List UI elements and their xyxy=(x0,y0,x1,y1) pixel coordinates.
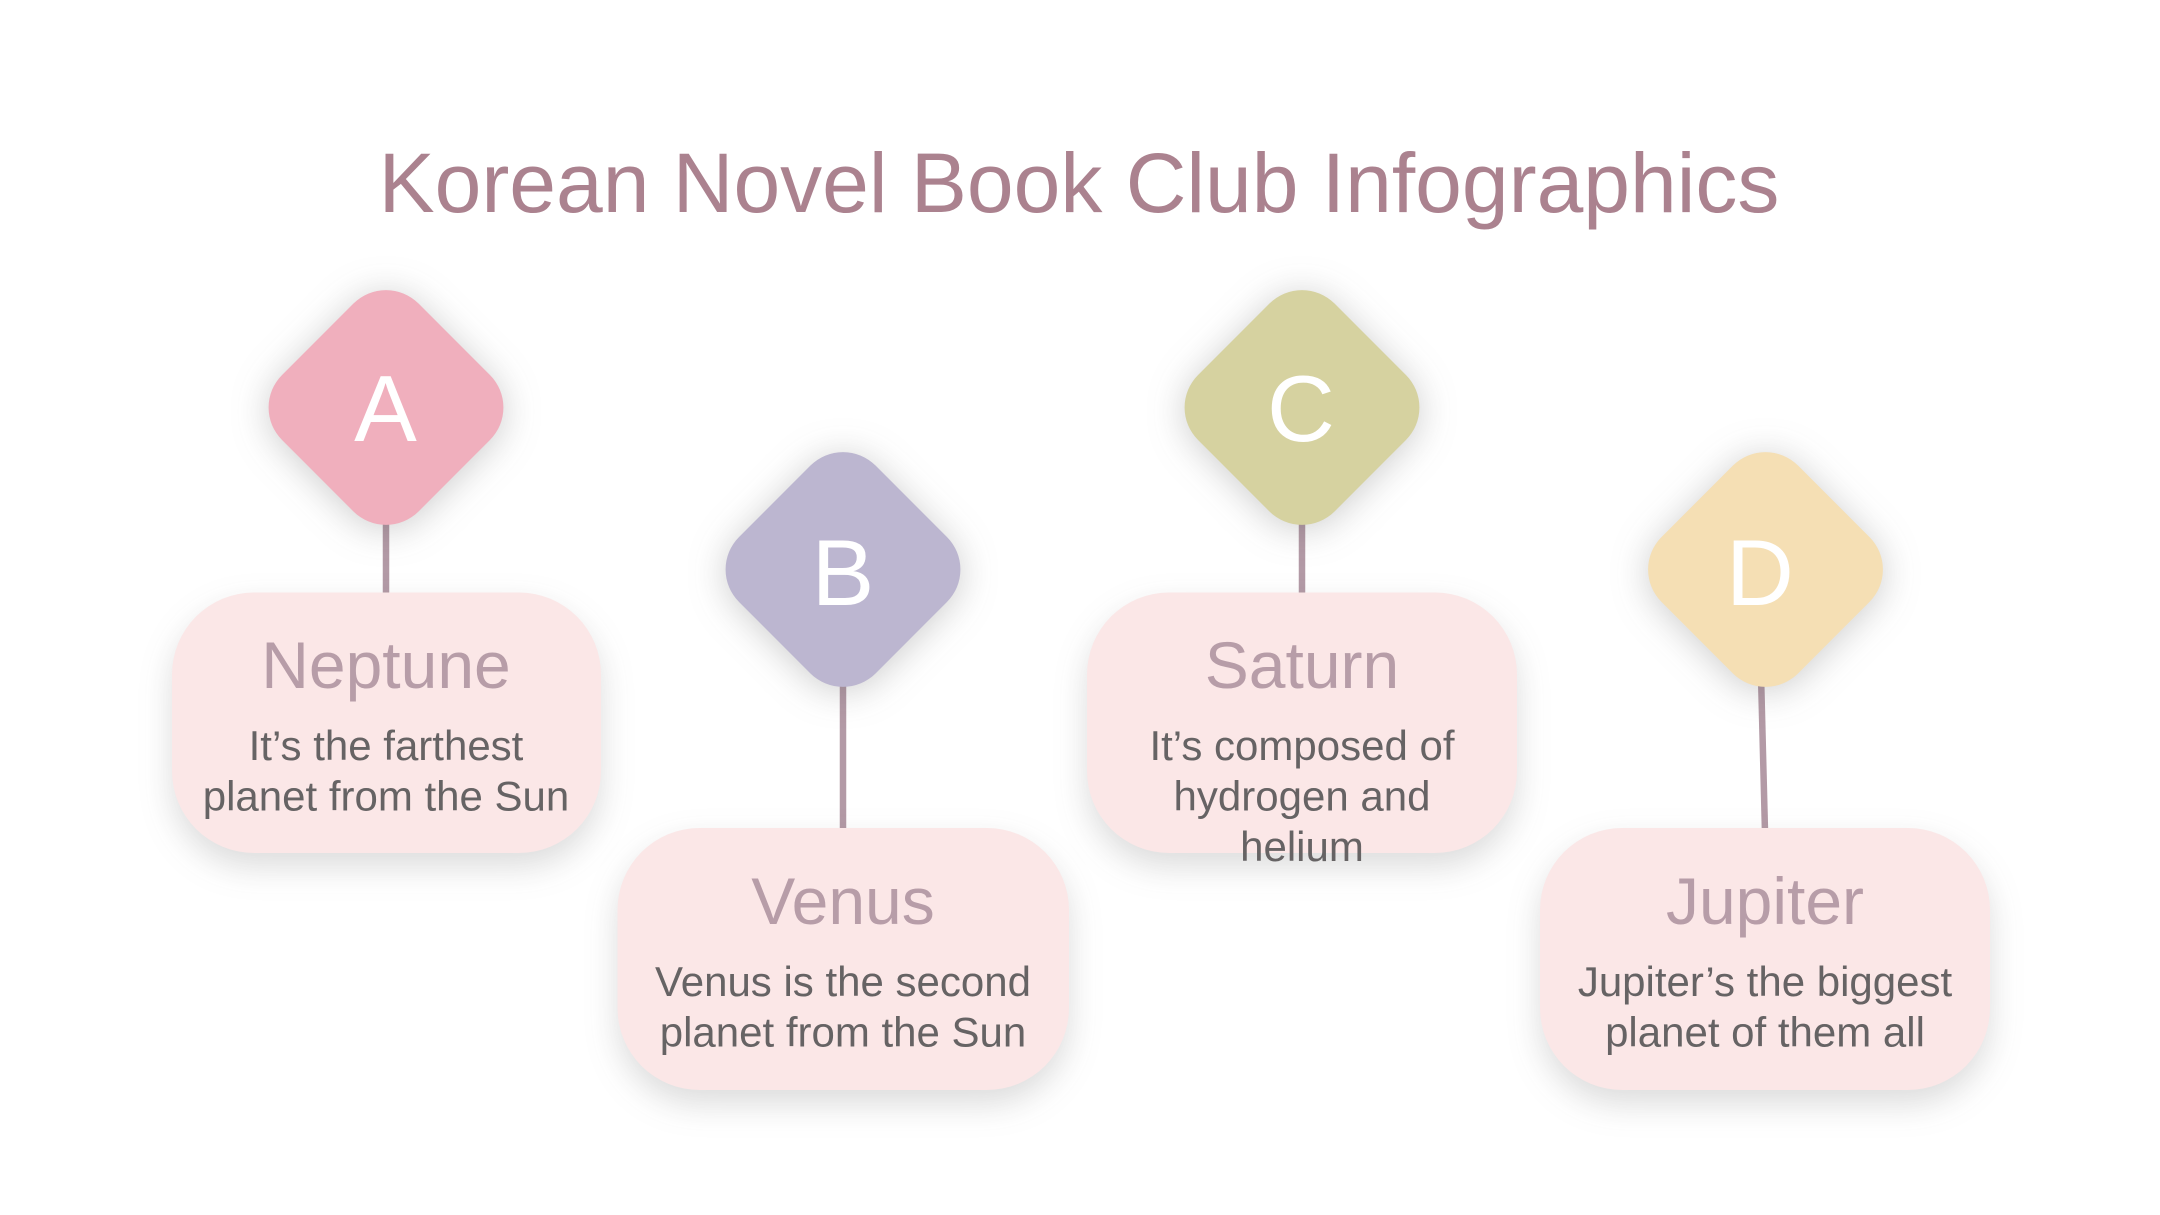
card: Neptune xyxy=(172,592,601,853)
title: Korean Novel Book Club Infographics xyxy=(379,136,1779,230)
description: Jupiter: Jupiter’s the biggest xyxy=(1578,958,1953,1005)
diamond: C xyxy=(1166,271,1438,544)
letter A: A xyxy=(354,356,417,461)
letter B: B xyxy=(812,520,874,625)
diamond: A xyxy=(250,271,522,544)
letter C: C xyxy=(1267,356,1335,461)
card: Jupiter xyxy=(1540,828,1990,1090)
card: Venus xyxy=(618,828,1069,1090)
description: Jupiter: planet of them all xyxy=(1605,1008,1925,1056)
panel: C Saturn xyxy=(1087,271,1517,870)
description: Saturn: It’s composed of xyxy=(1149,722,1455,769)
connector C xyxy=(1299,515,1305,597)
heading: Saturn: Saturn xyxy=(1205,628,1399,702)
diamond: B xyxy=(707,433,979,706)
description: Saturn: hydrogen and xyxy=(1174,772,1430,820)
heading: Neptune: Neptune xyxy=(261,628,511,702)
panel: D Jupiter xyxy=(1540,433,1990,1090)
connector B xyxy=(840,675,846,832)
description: Venus: Venus is the second xyxy=(655,958,1031,1005)
description: Neptune: planet from the Sun xyxy=(203,772,569,820)
panel: B Venus xyxy=(618,433,1069,1090)
description: Venus: planet from the Sun xyxy=(660,1008,1026,1056)
diamond: D xyxy=(1629,433,1902,706)
description: Neptune: It’s the farthest xyxy=(249,722,524,769)
connector A xyxy=(383,515,389,597)
description: Saturn: helium xyxy=(1240,823,1364,870)
connector D xyxy=(1761,675,1765,832)
card: Saturn xyxy=(1087,592,1517,853)
heading: Jupiter: Jupiter xyxy=(1666,864,1864,938)
heading: Venus: Venus xyxy=(751,864,935,938)
panel: A Neptune xyxy=(172,271,601,853)
letter D: D xyxy=(1726,520,1794,625)
